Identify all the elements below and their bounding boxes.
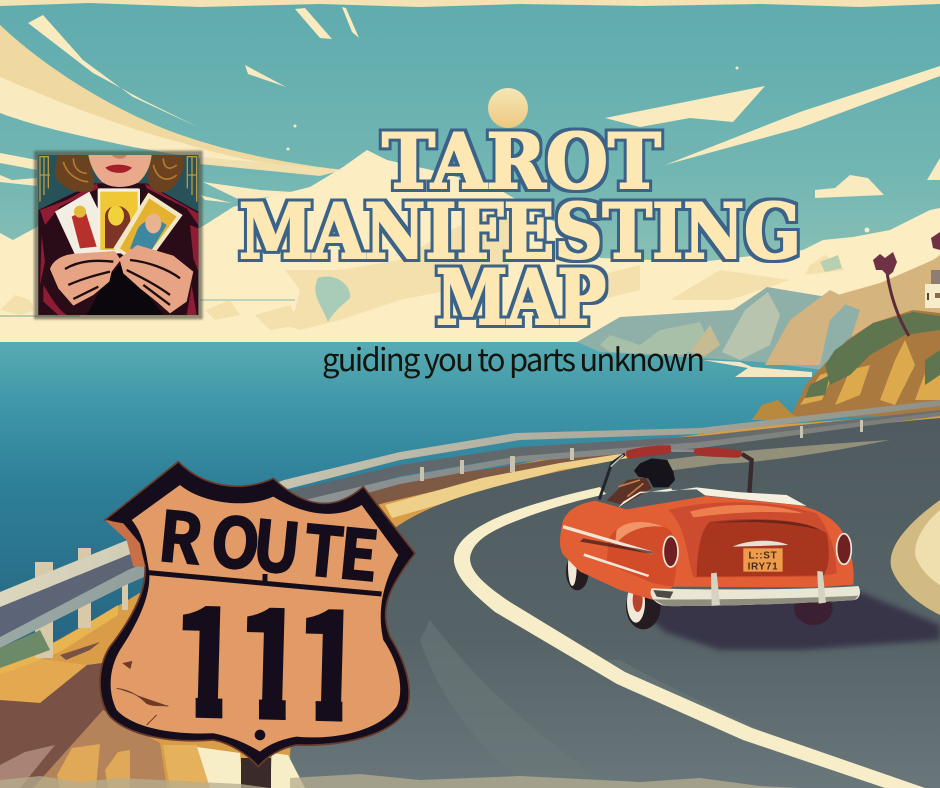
curb brown strip bbox=[284, 446, 640, 530]
word ROUTE: O bbox=[207, 486, 265, 590]
word ROUTE: R bbox=[155, 481, 207, 584]
sky streaks bbox=[0, 7, 940, 232]
gold frame ornaments bbox=[40, 157, 197, 202]
coastal hillside bbox=[790, 310, 940, 418]
license plate bbox=[743, 548, 783, 573]
left edge rust bbox=[105, 520, 145, 567]
road sign post bbox=[241, 758, 271, 788]
tan hillside behind bbox=[820, 255, 940, 340]
rust marks bbox=[117, 662, 168, 725]
worn bottom edge bbox=[0, 774, 800, 788]
number 111: 1 bbox=[231, 545, 311, 763]
shield orange face bbox=[111, 485, 400, 752]
headrests bbox=[626, 445, 742, 459]
license plate: IRY71 bbox=[748, 562, 778, 573]
trunk emblem bbox=[733, 541, 788, 547]
lips bbox=[105, 165, 132, 173]
title bbox=[239, 117, 801, 342]
right tarot card bbox=[113, 193, 183, 269]
road centre line bbox=[454, 487, 925, 788]
hillside house bbox=[925, 270, 940, 308]
tarot cards photo bbox=[34, 151, 203, 319]
jacket bbox=[38, 183, 198, 315]
license plate: L::ST bbox=[749, 551, 777, 562]
guard rail bbox=[0, 400, 940, 668]
sun bbox=[488, 88, 528, 128]
chrome bumper bbox=[651, 571, 860, 606]
nose shadow bbox=[112, 155, 127, 159]
route 111 shield sign bbox=[100, 462, 415, 767]
hair curl right bbox=[153, 158, 177, 179]
title line: manifesting: MANIFESTING bbox=[239, 187, 801, 276]
car body bbox=[560, 496, 854, 600]
curb cream strip bbox=[385, 442, 700, 518]
rear left wheel bbox=[626, 583, 661, 629]
sign bolt hole bbox=[255, 730, 265, 740]
ground beside road bbox=[0, 413, 940, 788]
palm tree bbox=[873, 232, 940, 336]
left tarot card bbox=[55, 192, 117, 269]
car shadow bbox=[630, 592, 940, 650]
right hand bbox=[119, 245, 193, 313]
hair left bbox=[55, 155, 94, 192]
subtitle: guiding you to parts unknown bbox=[322, 335, 705, 380]
red convertible car bbox=[560, 445, 860, 629]
title line: tarot: TAROT bbox=[382, 117, 661, 206]
number 111: 1 bbox=[167, 544, 247, 761]
photo shadow bbox=[34, 151, 203, 319]
divider line bbox=[148, 573, 382, 594]
shoreline foam bbox=[703, 360, 812, 377]
face and neck bbox=[88, 155, 152, 187]
distant lane marking bbox=[640, 440, 890, 474]
side chrome strip bbox=[583, 553, 649, 577]
photo backdrop bbox=[38, 155, 198, 315]
lower left roadside bbox=[0, 605, 305, 788]
title line: map: MAP bbox=[436, 253, 606, 342]
road brush streaks bbox=[420, 620, 880, 788]
word ROUTE: T bbox=[300, 495, 348, 598]
hair curl left bbox=[63, 158, 88, 182]
right road edge bbox=[891, 500, 940, 615]
shield black outline bbox=[100, 462, 415, 767]
trunk shading bbox=[668, 502, 837, 577]
word ROUTE: U bbox=[249, 491, 305, 593]
distant headland rock bbox=[752, 400, 800, 420]
windshield frame bbox=[599, 451, 752, 499]
distant cliffs bbox=[577, 287, 860, 372]
centre tarot card bbox=[98, 188, 140, 253]
white seats bbox=[618, 487, 807, 507]
left tail light bbox=[663, 536, 678, 567]
clouds bbox=[0, 150, 940, 345]
side panel highlights bbox=[607, 522, 677, 587]
number 111 bbox=[182, 606, 344, 722]
driver hair and arms bbox=[607, 458, 675, 505]
jacket folds bbox=[40, 183, 198, 315]
background: sky bbox=[0, 0, 940, 345]
front left wheel bbox=[566, 547, 589, 590]
left hand bbox=[50, 251, 121, 306]
right tail light bbox=[837, 534, 851, 564]
word ROUTE: E bbox=[335, 499, 383, 601]
number 111: 1 bbox=[290, 547, 370, 764]
sea bbox=[0, 342, 940, 682]
road surface bbox=[290, 418, 940, 788]
hair right bbox=[148, 155, 184, 193]
rear right wheel bbox=[794, 592, 833, 625]
dark chest shadow bbox=[87, 265, 163, 315]
